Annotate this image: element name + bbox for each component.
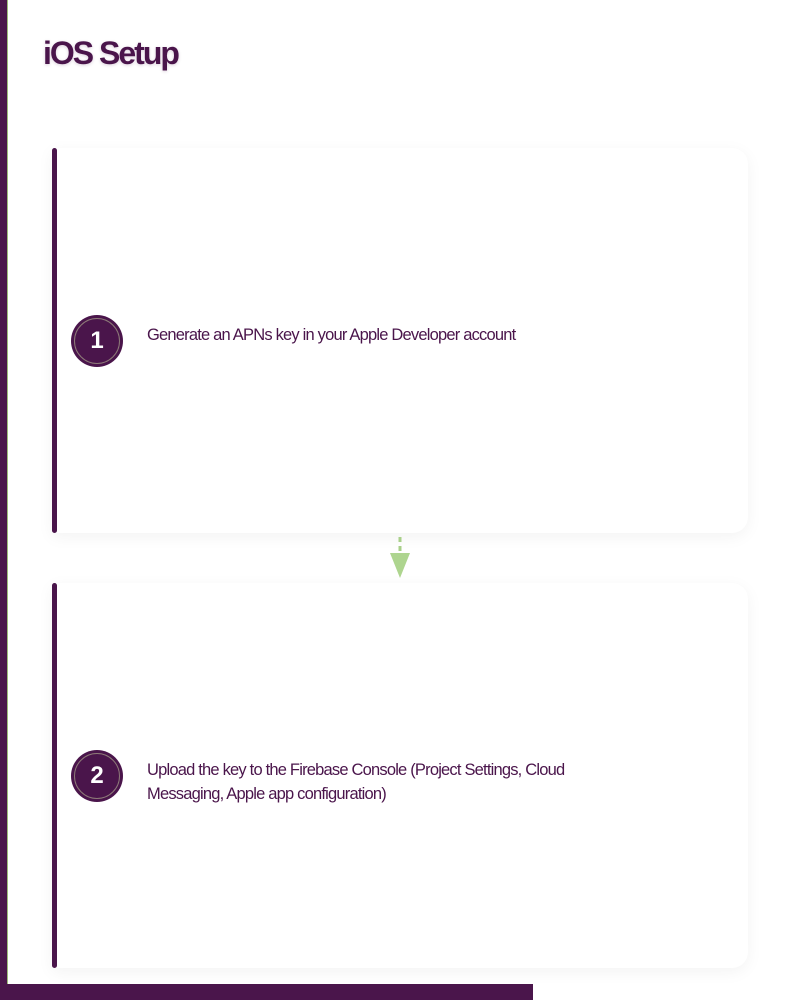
panel: step 1 xyxy=(52,148,748,533)
step 1 accent bar xyxy=(52,148,57,533)
bottom bar xyxy=(0,984,533,1000)
arrow: step 1 to step 2 xyxy=(390,537,410,578)
step 2 text: Upload the key to the Firebase Console (Project Settings, Cloud Messaging, Apple app configuration) xyxy=(147,761,564,803)
left accent stripe xyxy=(0,0,8,1000)
step 2 number badge xyxy=(71,750,123,802)
step 2 number badge: 2 xyxy=(90,762,104,789)
step 2 accent bar xyxy=(52,583,57,968)
step 1 text: Generate an APNs key in your Apple Developer account xyxy=(147,326,515,344)
title: iOS Setup xyxy=(43,35,178,71)
step 1 number badge xyxy=(71,315,123,367)
step 1 number badge: 1 xyxy=(90,327,104,354)
panel: step 2 xyxy=(52,583,748,968)
